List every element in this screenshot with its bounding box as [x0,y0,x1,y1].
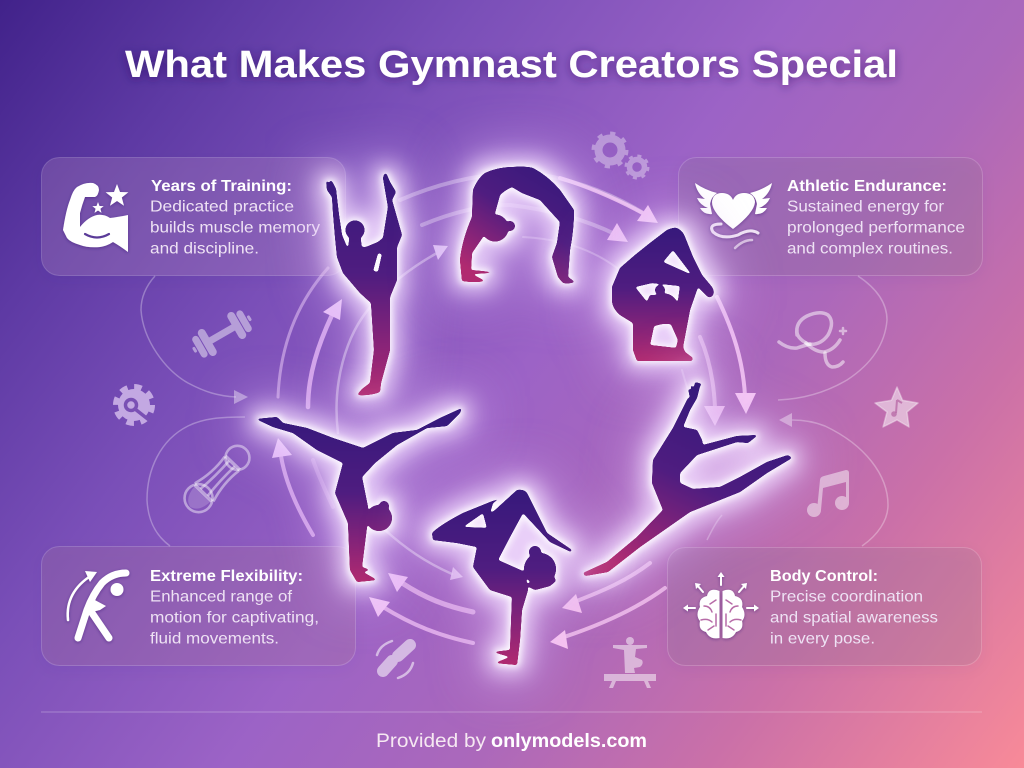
icon: gears [594,134,648,178]
silhouette: handstand split [256,408,462,582]
heading: body control: Body Control: [770,568,878,585]
text: athletic endurance: prolonged performance [787,220,965,236]
panel: years of training [42,158,346,276]
icon: star with music note [875,387,918,427]
text: years of training: and discipline. [150,240,259,258]
arrowhead: right lower arc [779,413,792,427]
silhouette: backbend bridge [460,167,575,283]
arrowhead: left arc [234,390,248,404]
text: extreme flexibility [150,588,319,648]
arc: top thin [523,237,617,268]
footer credit [376,731,647,752]
title: What Makes Gymnast Creators Special [125,44,898,86]
icon: balance beam [604,637,656,688]
arc: right thin [682,370,692,402]
icon: flexed arm with stars [63,183,128,252]
arrow: bottom right lower [550,588,665,649]
text: years of training: builds muscle memory [150,220,320,236]
icon: dumbbell [186,305,258,363]
silhouette: standing needle split [326,173,402,395]
text: extreme flexibility: motion for captivating, [150,610,319,626]
arc: left outer [278,268,328,397]
silhouette: split leap [583,382,792,576]
text: body control: and spatial awareness [770,610,938,626]
text: athletic endurance [787,198,965,258]
icon: side stretch figure [68,571,126,638]
text: extreme flexibility: fluid movements. [150,630,279,648]
icon: resistance band [179,440,256,518]
arc: left faded [313,460,333,507]
circular flow arrows [272,173,756,649]
icon: gear with wrench [116,387,152,423]
text: body control [770,588,938,648]
arrow: bottom right upper [562,563,650,613]
thin outer arcs [141,276,888,546]
arrow: right inner [700,337,725,426]
arrow: bottom left upper [388,573,473,612]
icon: joint [377,641,413,678]
panel: body control [668,548,982,666]
arrow: standing to bridge [337,245,448,433]
arrow: top inner [422,205,628,242]
arrow: left inner [308,299,342,407]
icon: ribbon swirl [779,313,846,367]
icon: music note [807,470,849,517]
footer credit: onlymodels.com [491,731,647,752]
text: athletic endurance: and complex routines. [787,240,953,258]
heading: extreme flexibility: Extreme Flexibility: [150,568,303,585]
arrow: handstand to scorpion [385,530,463,580]
footer divider [41,711,982,713]
text: extreme flexibility: Enhanced range of [150,588,293,606]
silhouette: contortion scorpion [612,228,714,361]
arrow: right outer [717,297,756,414]
text: years of training: Dedicated practice [150,198,294,216]
icon: winged heart with ribbon [695,183,772,248]
icon: brain with arrows [683,572,759,638]
text: athletic endurance: Sustained energy for [787,198,945,216]
arrow: left lower [272,438,313,535]
silhouette: scorpion handstand [432,490,572,665]
heading: years of training: Years of Training: [151,178,292,195]
arrow: top outer [400,173,658,223]
text: years of training [150,198,320,258]
text: body control: in every pose. [770,630,875,648]
heading: athletic endurance: Athletic Endurance: [787,178,947,195]
footer credit: Provided by [376,731,487,752]
panel: extreme flexibility [42,546,356,666]
panel: athletic endurance [678,158,982,276]
text: body control: Precise coordination [770,588,923,606]
arrow: bottom left lower [369,597,473,643]
